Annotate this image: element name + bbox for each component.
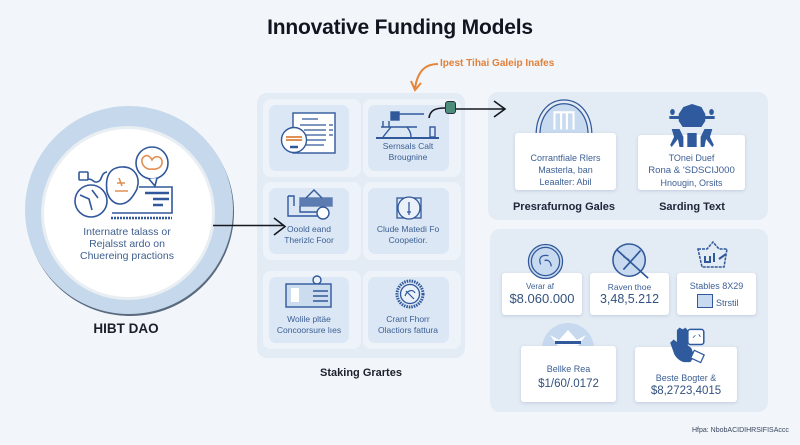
- tile text: Concoorsure lıes: [277, 325, 341, 335]
- tile: screen: [263, 271, 361, 349]
- card: value two: [590, 273, 669, 315]
- tile: gear: [363, 271, 461, 349]
- tile text: Olactiors fattura: [378, 325, 438, 335]
- card: value three: Strstil: [716, 298, 738, 308]
- card: value four: Bellke Rea: [547, 364, 590, 374]
- card: value one: Verar af: [526, 282, 554, 291]
- card: seeding: Hnougin, Orsits: [660, 178, 723, 188]
- circle text: Rejalsst ardo on: [89, 238, 165, 250]
- tile text: [383, 141, 434, 162]
- card: value three: [677, 273, 756, 315]
- card: seeding: Rona & 'SDSCIJ000: [648, 165, 735, 176]
- icon: small table: [697, 294, 713, 308]
- card: presale: Corrantfiale Rlers: [530, 153, 601, 163]
- card: value three: Stables 8X29: [690, 281, 743, 291]
- tile text: [377, 224, 439, 245]
- card: value five: $8,2723,4015: [651, 385, 721, 397]
- label: seeding: Sarding Text: [659, 201, 725, 213]
- icon: screen: [285, 275, 332, 308]
- tile: document: [263, 99, 361, 177]
- card: value four: $1/60/.0172: [538, 378, 599, 390]
- connector: node to right panel: [428, 100, 506, 118]
- card: value five: Beste Bogter &: [656, 373, 716, 383]
- icon: desk: [376, 111, 439, 139]
- card: seeding: [638, 135, 745, 190]
- icon: meeting: [669, 104, 715, 147]
- card: value two: 3,48,5.212: [600, 292, 659, 306]
- icon: arch: [536, 99, 592, 133]
- callout text: Ipest Tihai Galeip Inafes: [440, 58, 554, 69]
- icon: crossed circle: [612, 243, 649, 279]
- tile text: Coopetior.: [389, 235, 427, 245]
- card: value one: $8.060.000: [509, 291, 575, 306]
- panel: HIBT DAO circle: [25, 106, 234, 316]
- tile text: [277, 314, 341, 335]
- connector line: [428, 100, 506, 118]
- card: presale: Leaalter: Abil: [539, 177, 592, 187]
- tile text: Therizlc Foor: [284, 235, 334, 245]
- tile text: [284, 224, 334, 245]
- circle text: Internatre talass or: [83, 226, 171, 238]
- label: HIBT DAO: HIBT DAO: [93, 321, 159, 336]
- tile text: Clude Matedi Fo: [377, 224, 439, 234]
- tile text: Wolile pltäe: [287, 314, 331, 324]
- panel: staking grid: [257, 93, 465, 358]
- icon: emblem: [396, 196, 422, 220]
- card: seeding: TOnei Duef: [669, 153, 714, 163]
- circle text: Chuereing practions: [80, 250, 174, 262]
- icon: network star: [697, 241, 728, 268]
- tile: chart: [263, 182, 361, 260]
- icon: hand and chat: [670, 328, 705, 364]
- panel: presale and seeding: [488, 92, 768, 220]
- footer note: Hfpa: NbobACIDIHRSIFISAccc: [692, 427, 789, 434]
- label: presale: Presrafurnog Gales: [513, 201, 615, 213]
- icon: chat and globe: [74, 146, 173, 220]
- tile text: [378, 314, 438, 335]
- callout arrow: [410, 63, 438, 92]
- arrow: circle to staking panel: [213, 218, 286, 236]
- card: value five: [635, 347, 737, 402]
- icon: gear: [396, 280, 424, 308]
- tile: desk: [363, 99, 461, 177]
- card: value one: [502, 273, 582, 315]
- icon: document: [280, 112, 336, 154]
- tile text: Crant Fhorr: [386, 314, 430, 324]
- node: [445, 101, 456, 114]
- tile: emblem: [363, 182, 461, 260]
- panel: funding values: [490, 229, 768, 412]
- icon: arrows circle: [528, 244, 564, 280]
- panel label: staking grades: Staking Grartes: [320, 367, 402, 379]
- card: presale: Masterla, ban: [538, 165, 593, 175]
- circle ring: [25, 106, 234, 316]
- icon: crown badge: [542, 323, 594, 346]
- icon: machine: [287, 189, 333, 220]
- circle text: [80, 226, 174, 262]
- callout: orange note: [410, 58, 554, 92]
- card: presale: [515, 133, 616, 190]
- card: value four: [521, 346, 616, 402]
- title: Innovative Funding Models: [267, 16, 533, 39]
- tile text: Ooold eand: [287, 224, 331, 234]
- tile text: Sernsals Calt: [383, 141, 433, 151]
- tile text: Brougnine: [389, 152, 427, 162]
- card: value two: Raven thoe: [608, 282, 651, 292]
